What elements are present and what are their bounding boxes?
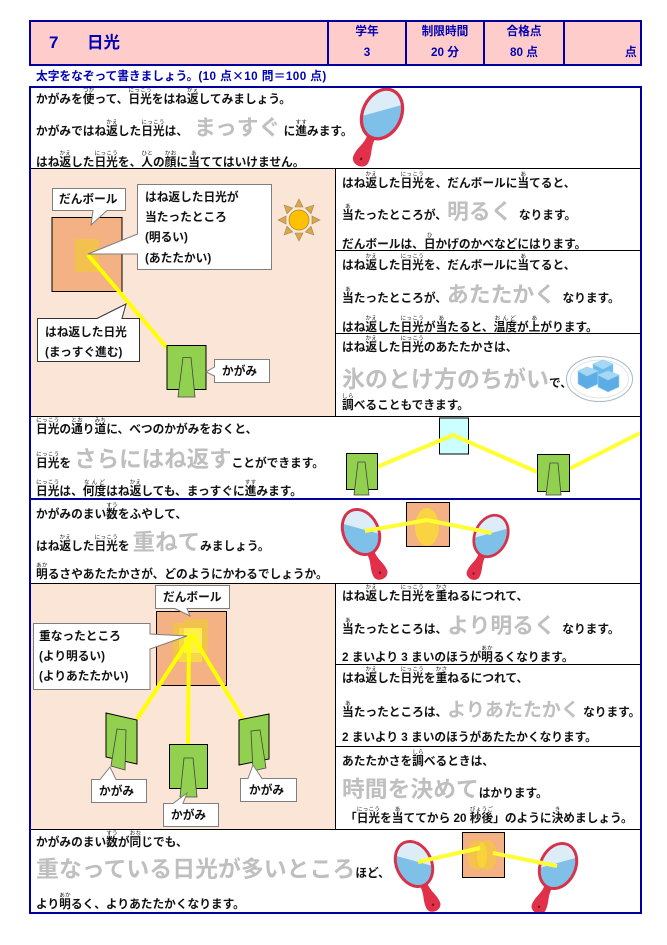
callout: overlapped spot: (よりあたたかい): [39, 670, 128, 683]
right green mirror: [239, 714, 269, 771]
cardboard: [52, 218, 122, 292]
text line: はね返かえ した日光にっこう を重かさ ねるにつれて、: [342, 667, 528, 685]
callout: reflected sunlight: (まっすぐ進む): [45, 345, 123, 359]
diagram: two mirrors with overlapped light: [29, 830, 642, 911]
info cell: time limit: 制限時間: [422, 25, 468, 38]
text line: かがみのまい数すう をふやして、: [36, 503, 187, 521]
callout: lit spot: [88, 184, 272, 270]
callout: cardboard: だんボール: [163, 591, 222, 604]
text line: はね返かえ した日光にっこう を、人ひと の顔かお に当あ ててはいけません。: [36, 151, 304, 169]
text line with answer: 当あ たったところが、明るく なります。: [342, 199, 576, 224]
callout: lit spot: (あたたかい): [145, 252, 211, 265]
callout: mirror: [206, 360, 270, 382]
left green mirror: [106, 713, 137, 770]
callout: cardboard: [52, 188, 126, 225]
text line: はね返かえ した日光にっこう を、だんボールに当あ てると、: [342, 172, 575, 190]
panel: three mirrors diagram: [31, 584, 335, 829]
callout: centre mirror: かがみ: [171, 808, 206, 822]
text cell: ice: [342, 335, 633, 412]
info cell: passing score: 合格点: [506, 25, 542, 38]
text line: はね返かえ した日光にっこう を、だんボールに当あ てると、: [342, 254, 575, 272]
panel: using a mirror: [36, 88, 404, 169]
panel: single mirror diagram: [31, 169, 335, 416]
icon: sun: [278, 199, 320, 241]
text line with answer: 当あ たったところは、より明るく なります。: [342, 613, 620, 638]
text line: かがみを使つか って、日光にっこう をはね返かえ してみましょう。: [36, 88, 291, 106]
text line: はね返かえ した日光にっこう のあたたかさは、: [342, 336, 517, 354]
text cell: timing: [342, 749, 633, 825]
cardboard: [156, 612, 226, 686]
text line: 日光にっこう は、何度なんど はね返かえ しても、まっすぐに進すす みます。: [36, 480, 302, 498]
text cell: brighter: [342, 584, 620, 664]
callout: overlapped spot: 重なったところ: [39, 629, 121, 643]
info cell: score: 点: [625, 46, 637, 59]
callout: overlapped spot: (より明るい): [39, 650, 105, 663]
diagram: three mirrors: [346, 418, 640, 496]
text cell: brightness: [342, 171, 586, 251]
callout: overlapped spot: [34, 624, 187, 690]
info cell: grade: [355, 24, 379, 59]
centre green mirror: [170, 744, 208, 797]
callout: reflected sunlight: [38, 304, 140, 362]
icon: hand mirror: [352, 88, 404, 166]
icon: ice on a plate: [566, 356, 633, 402]
info cell: time limit: [422, 24, 468, 59]
lesson title: 日光: [87, 34, 120, 52]
callout: lit spot: 当たったところ: [145, 210, 227, 224]
panel: where overlapping is greatest: [29, 830, 642, 911]
callout: centre mirror: [164, 793, 218, 826]
text line: より明あか るく、よりあたたかくなります。: [36, 893, 245, 911]
instruction: 太字をなぞって書きましょう。(10 点×10 問＝100 点): [36, 67, 327, 84]
green mirror: [167, 346, 206, 397]
text line: 日光にっこう の通とお り道みち に、べつのかがみをおくと、: [36, 418, 257, 436]
callout: reflected sunlight: はね返した日光: [45, 325, 127, 339]
callout: lit spot: (明るい): [145, 231, 188, 244]
info cell: grade: 3: [364, 46, 370, 59]
info cell: time limit: 20 分: [431, 46, 459, 59]
callout: left mirror: かがみ: [99, 784, 134, 798]
text line: はね返かえ した日光にっこう が当あ たると、温度おんど が上あ がります。: [342, 316, 598, 334]
light beam: [88, 255, 167, 348]
text line: 「日光にっこう を当あ ててから 20 秒後びょうご 」のように決き めましょう。: [345, 807, 633, 825]
text line with answer: 当あ たったところは、よりあたたかく なります。: [342, 700, 640, 721]
info cell: passing score: 80 点: [510, 46, 538, 59]
text line with answer: はね返かえ した日光にっこう を重ねてみましょう。: [36, 530, 270, 555]
callout: lit spot: はね返した日光が: [145, 190, 239, 204]
text line with answer: 日光にっこう をさらにはね返すことができます。: [36, 447, 324, 472]
text line: 調しら べることもできます。: [342, 394, 469, 412]
lesson number: 7: [49, 33, 58, 52]
text line: はね返かえ した日光にっこう を重かさ ねるにつれて、: [342, 585, 528, 603]
text cell: warmth: [342, 253, 620, 334]
callout: mirror: かがみ: [222, 364, 257, 378]
text line: 明あか るさやあたたかさが、どのようにかわるでしょうか。: [36, 563, 328, 581]
text line with answer: 氷のとけ方のちがいで、: [342, 366, 572, 392]
callout: cardboard: だんボール: [59, 193, 118, 206]
panel: more mirrors: [36, 502, 510, 581]
callout: right mirror: [240, 765, 296, 802]
info cell: grade: 学年: [355, 25, 379, 38]
diagram: two mirrors on cardboard: [340, 502, 510, 580]
light beams: [137, 635, 243, 744]
text line with answer: 当あ たったところが、あたたかく なります。: [342, 282, 620, 307]
info cell: passing score: [506, 24, 542, 59]
text line with answer: かがみではね返かえ した日光にっこう は、 まっすぐ に進すす みます。: [36, 115, 353, 140]
callout: left mirror: [92, 767, 146, 802]
text line: かがみのまい数すう が同おな じでも、: [36, 831, 188, 849]
text line: 2 まいより 3 まいのほうが明あか るくなります。: [342, 646, 574, 664]
header: title bar: [29, 20, 642, 64]
text line: だんボールは、日ひ かげのかべなどにはります。: [342, 233, 586, 251]
panel: reflect again: [36, 417, 640, 498]
text cell: warmer: [342, 666, 640, 744]
text line with answer: 時間を決めてはかります。: [342, 776, 548, 802]
text line with answer: 重なっている日光が多いところほど、: [36, 856, 390, 882]
text line: あたたかさを調しら べるときは、: [342, 750, 494, 768]
callout: cardboard: [156, 586, 230, 616]
callout: right mirror: かがみ: [249, 783, 284, 797]
text line: 2 まいより 3 まいのほうがあたたかくなります。: [342, 731, 597, 744]
